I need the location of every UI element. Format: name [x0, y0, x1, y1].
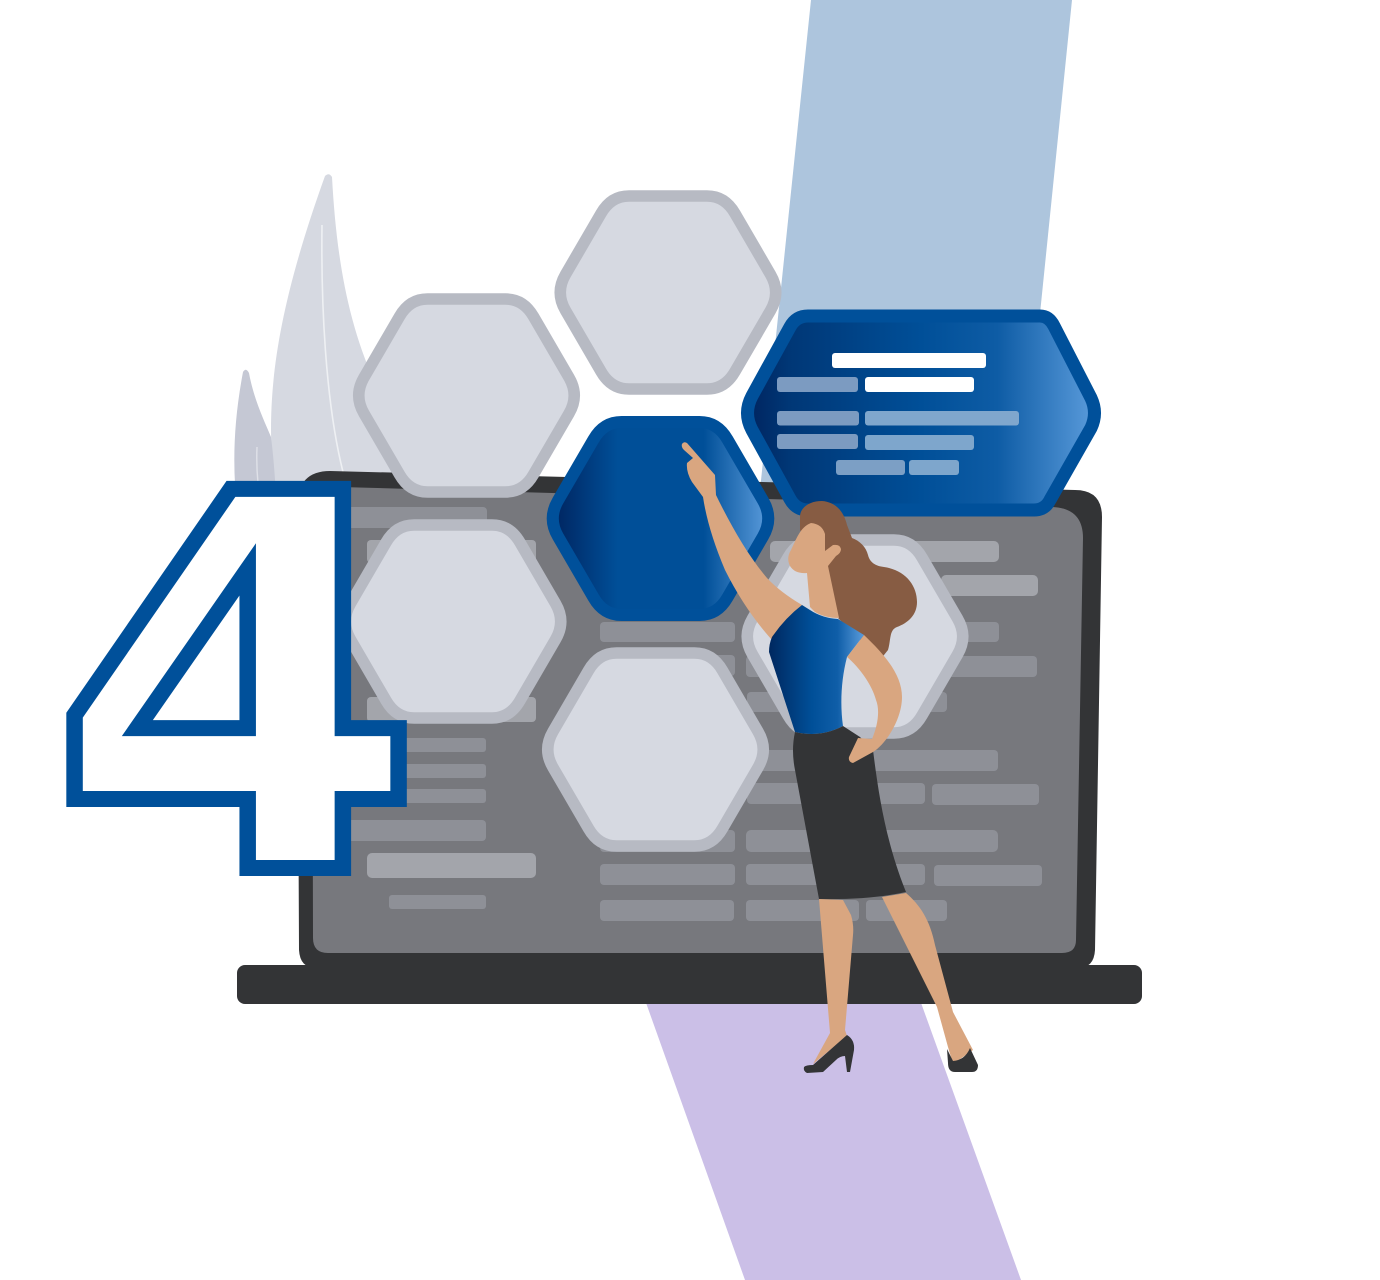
right shoe [947, 1048, 978, 1072]
bent arm [847, 635, 902, 763]
laptop screen [312, 487, 1083, 953]
laptop [237, 471, 1142, 1004]
hexagon: top gray [560, 196, 776, 389]
head and neck [788, 523, 841, 618]
plant leaves [234, 174, 400, 530]
hexagon: bottom center gray [548, 653, 763, 846]
woman figure [682, 442, 978, 1073]
hexagon: upper left gray [359, 299, 574, 492]
hexagon: large blue data panel [748, 316, 1094, 510]
blue light band [760, 0, 1072, 490]
left leg [813, 899, 853, 1064]
laptop base [237, 965, 1142, 1004]
hexagon: lower left gray [345, 525, 561, 718]
hexagon: right gray [747, 540, 963, 733]
number 4: 4 [50, 386, 423, 991]
raised arm [682, 442, 802, 640]
shirt [769, 605, 864, 734]
skirt [793, 726, 906, 899]
hair [800, 501, 917, 660]
laptop lid [297, 471, 1102, 968]
right leg [882, 893, 973, 1064]
purple light band [645, 1000, 1021, 1280]
left shoe [804, 1035, 854, 1073]
screen content bars [340, 507, 1042, 921]
hexagon: center blue [553, 422, 768, 615]
panel bars [777, 353, 1019, 475]
